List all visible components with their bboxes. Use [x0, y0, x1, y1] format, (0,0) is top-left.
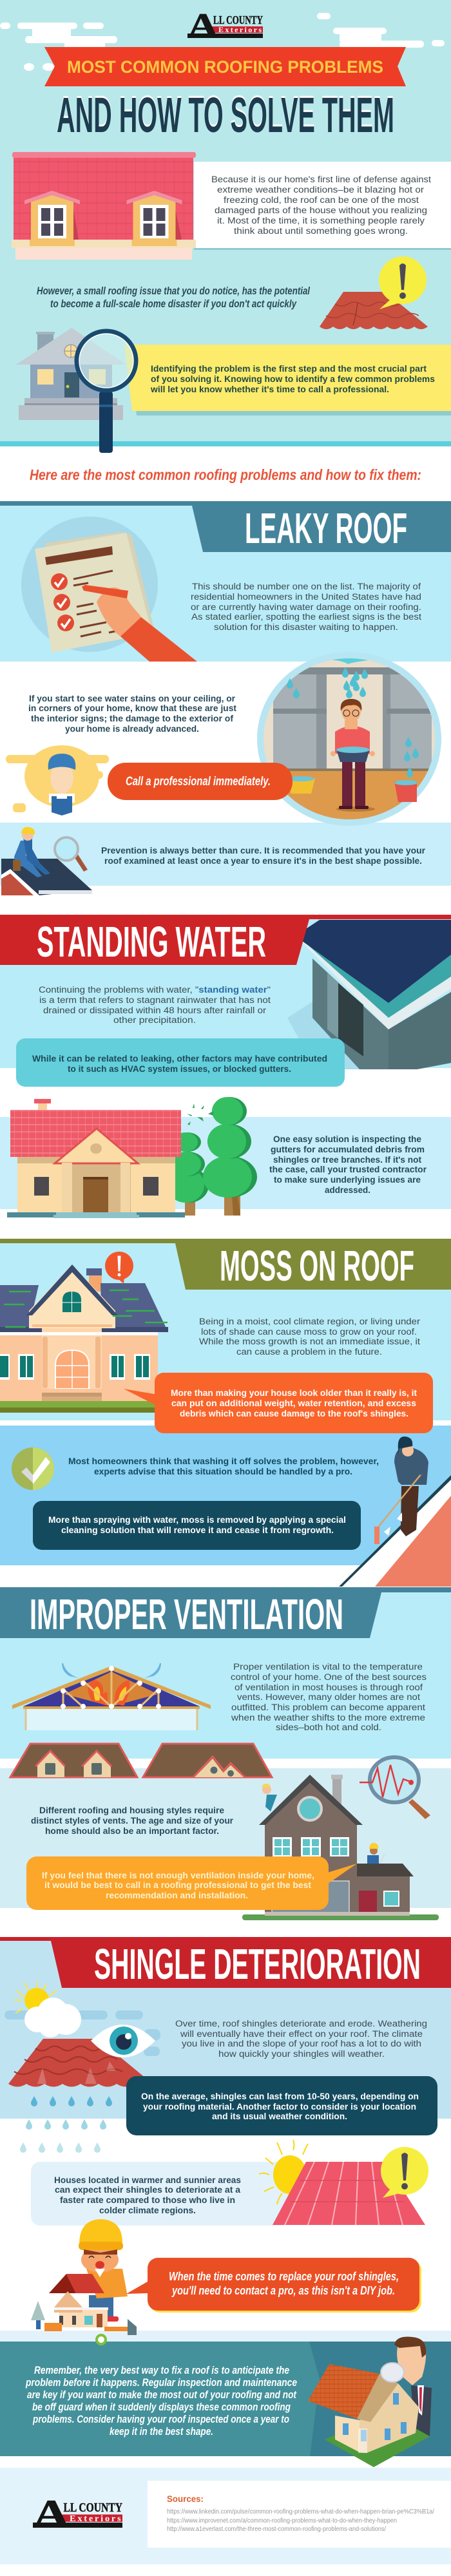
illustration: sloped salmon roof — [339, 1475, 451, 1587]
logo: footer — [33, 2492, 122, 2536]
icon: gray house — [16, 328, 126, 420]
text: proper ventilation: when the weather shifts to the more extreme — [231, 1713, 425, 1722]
text: roofing styles: home should also be an important factor. — [45, 1826, 219, 1836]
icon: repair worker — [6, 745, 109, 816]
raindrops — [20, 2096, 112, 2153]
decorative clouds — [0, 13, 445, 71]
text: proper ventilation — [231, 1662, 427, 1732]
panel: warmer areas: faster rate compared to those who live in — [60, 2195, 235, 2205]
icon: sun and cloud sky pills — [5, 1981, 160, 2056]
intro text panel: extreme weather conditions–be it blazing hot or — [217, 185, 425, 195]
illustration: house with moss — [0, 1264, 168, 1413]
icon: eye — [91, 2025, 155, 2057]
text: closing reminder: keep it in the best shape. — [110, 2425, 213, 2438]
text: water stains: the interior signs; the damage to the exterior of — [31, 714, 234, 723]
panel: warmer areas: colder climate regions. — [99, 2206, 196, 2215]
text: closing reminder: are key if you want to make the most out of your roofing and not — [27, 2389, 297, 2401]
text: standing water definition — [39, 985, 271, 1025]
warning statement: However, a small roofing issue that you do notice, has the potential — [37, 285, 311, 297]
icon: sun over pink roof — [259, 2140, 425, 2225]
intro text panel: think about until something goes wrong. — [234, 226, 408, 236]
icon: man with bowl — [331, 699, 375, 812]
callout: ventilation professional — [26, 1856, 357, 1910]
text: water stains — [28, 694, 237, 734]
illustration: red roof house — [7, 1099, 185, 1218]
text: water stains: your home is already advanced. — [65, 724, 199, 734]
text: moss cause: lots of shade can cause moss to grow on your roof. — [201, 1327, 417, 1337]
callout: ventilation professional: If you feel that there is not enough ventilation inside your home, — [42, 1871, 314, 1880]
text: closing reminder: be off guard when it suddenly displays these common roofing — [32, 2401, 291, 2413]
icon: blonde worker on roof — [262, 1784, 277, 1811]
callout: moss damage: can put on additional weight, water retention, and excess — [171, 1398, 416, 1408]
panel: warmer areas: can expect their shingles to deteriorate at a — [55, 2185, 241, 2195]
logo: footer: LL COUNTY — [64, 2499, 122, 2515]
icon: checklist with hand — [21, 517, 197, 667]
panel: sources: http://www.a1everlast.com/the-three-most-common-roofing-problems-and-solutions/ — [167, 2525, 386, 2533]
text: proper ventilation: Proper ventilation is vital to the temperature — [233, 1662, 423, 1672]
text: shingles erode: Over time, roof shingles deteriorate and erode. Weathering — [175, 2019, 427, 2028]
illustration: brown house — [242, 1775, 439, 1920]
panel: sources — [148, 2481, 451, 2548]
text: gutter solution: addressed. — [325, 1185, 370, 1195]
text: gutter solution: the case, call your trusted contractor — [269, 1165, 427, 1174]
text: gutter solution: One easy solution is inspecting the — [273, 1134, 421, 1144]
text: moss cause: Being in a moist, cool climate region, or living under — [199, 1317, 421, 1326]
text: washing it off: experts advise that this situation should be handled by a pro. — [94, 1467, 352, 1476]
callout: spraying with water: cleaning solution that will remove it and cease it from regrowth. — [61, 1525, 334, 1535]
logo: footer: Exteriors — [70, 2514, 121, 2524]
callout: contact a pro — [126, 2258, 421, 2313]
text: closing reminder — [25, 2364, 297, 2438]
callout: call a professional — [108, 763, 293, 800]
text: water stains: If you start to see water stains on your ceiling, or — [29, 694, 236, 703]
callout: spraying with water: More than spraying with water, moss is removed by applying a special — [48, 1515, 346, 1525]
text: gutter solution: gutters for accumulated debris from — [271, 1145, 425, 1154]
illustration: man catching leak in circle — [257, 652, 445, 829]
callout: moss damage: debris which can cause damage to the roof's shingles. — [180, 1409, 408, 1418]
icon: check badge — [12, 1447, 54, 1490]
panel: sources: Sources: — [167, 2494, 204, 2504]
title ribbon: MOST COMMON ROOFING PROBLEMS — [67, 57, 383, 77]
callout: ventilation professional: it would be best to call in a roofing professional to get the best — [44, 1880, 312, 1890]
text: roofing styles: Different roofing and housing styles require — [39, 1806, 224, 1815]
icon: two roofs with dormers — [10, 1744, 272, 1777]
text: proper ventilation: outfitted. This problem can become apparent — [231, 1703, 425, 1712]
icon: buckets — [287, 776, 417, 802]
intro text panel: freezing cold, the roof can be one of the most — [224, 195, 419, 205]
text: leaky roof intro: or are currently having water damage on their roofing. — [191, 602, 421, 612]
icon: yellow alert bubble — [381, 2147, 428, 2198]
illustration: man inspecting house — [308, 2337, 432, 2467]
water drops — [287, 667, 419, 778]
text: moss cause: can cause a problem in the future. — [236, 1347, 382, 1357]
illustration: man cleaning roof — [374, 1436, 428, 1544]
section header: moss on roof — [0, 1239, 451, 1290]
warning statement — [37, 285, 311, 310]
panel: warmer areas — [31, 2162, 290, 2226]
text: gutter solution: shingles or tree branches. If it's not — [273, 1155, 422, 1165]
text: shingles erode: you live in and the slope of your roof has a lot to do with — [182, 2039, 421, 2048]
callout: shingle lifespan: On the average, shingles can last from 10-50 years, depending on — [141, 2092, 419, 2101]
text: prevention: roof examined at least once a year to ensure it's in the best shape possible. — [104, 856, 422, 866]
callout: shingle lifespan — [126, 2076, 437, 2135]
text: washing it off: Most homeowners think that washing it off solves the problem, however, — [68, 1456, 379, 1466]
icon: magnifying glass — [77, 331, 136, 453]
yellow panel: identifying the problem — [124, 345, 451, 415]
text: standing water definition: other precipitation. — [113, 1015, 196, 1025]
text: proper ventilation: vents. However, many older homes are not — [237, 1692, 420, 1702]
text: roofing styles — [31, 1806, 234, 1836]
text: shingles erode: how quickly your shingles will weather. — [218, 2049, 385, 2059]
logo: footer: A — [33, 2492, 70, 2536]
text: shingles erode — [175, 2019, 427, 2059]
icon: worker with hard hat — [367, 1843, 385, 1864]
text: proper ventilation: control of your home. One of the best sources — [231, 1672, 427, 1682]
text: gutter solution — [269, 1134, 427, 1195]
callout: spraying with water — [33, 1501, 361, 1550]
icon: cracked roof with alert bubble — [320, 256, 428, 329]
text: proper ventilation: of ventilation in most houses is through roof — [235, 1683, 423, 1692]
panel: warmer areas: Houses located in warmer and sunnier areas — [54, 2175, 241, 2185]
text: leaky roof intro: As stated earlier, spotting the earliest signs is the best — [191, 612, 421, 622]
text: proper ventilation: sides–both hot and cold. — [276, 1722, 381, 1732]
illustration: roof truss with heat — [12, 1663, 211, 1730]
yellow panel: identifying the problem: will let you know whether it's time to call a professional. — [150, 385, 389, 394]
intro text panel: it. Most of the time, it is something people rarely — [217, 216, 425, 225]
text: standing water definition: drained or dissipated within 48 hours after rainfall or — [43, 1006, 267, 1015]
yellow panel: identifying the problem: Identifying the problem is the first step and the most crucial part — [151, 364, 427, 374]
icon: roofer with magnifier — [1, 827, 92, 895]
callout: moss damage: More than making your house look older than it really is, it — [171, 1388, 417, 1398]
callout: other factors: While it can be related to leaking, other factors may have contributed — [32, 1054, 327, 1064]
logo: All County Exteriors — [187, 6, 263, 45]
section header: standing water: STANDING WATER — [37, 918, 266, 966]
icon: red roof with rain — [8, 2039, 153, 2087]
icon: orange alert bubble — [105, 1252, 133, 1284]
icon: magnifier with pulse — [360, 1757, 430, 1819]
text: closing reminder: problems. Consider having your roof inspected once a year to — [32, 2413, 289, 2425]
icon: red roof with dormers — [12, 152, 196, 260]
callout: other factors: to it such as HVAC system issues, or blocked gutters. — [68, 1064, 291, 1074]
callout: shingle lifespan: your roofing material. Another factor to consider is your location — [143, 2102, 416, 2112]
warning statement: to become a full-scale home disaster if you don't act quickly — [50, 298, 297, 310]
text: standing water definition: Continuing the problems with water, " standing water " — [39, 985, 271, 995]
text: leaky roof intro — [191, 582, 421, 632]
section header: leaky roof — [0, 501, 451, 553]
callout: other factors — [16, 1038, 345, 1087]
text: prevention: Prevention is always better than cure. It is recommended that you have your — [101, 846, 426, 855]
text: closing reminder: problem before it happens. Regular inspection and maintenance — [25, 2376, 297, 2389]
yellow panel: identifying the problem: of you solving it. Knowing how to identify a few common problems — [151, 374, 435, 384]
text: prevention — [101, 846, 426, 866]
callout: ventilation professional: recommendation and installation. — [106, 1891, 248, 1900]
text: shingles erode: will eventually have their effect on your roof. The climate — [180, 2029, 423, 2039]
intro text panel: damaged parts of the house without you realizing — [215, 205, 427, 215]
callout: contact a pro: you'll need to contact a pro, as this isn't a DIY job. — [171, 2284, 395, 2297]
icon: trees — [167, 1097, 257, 1216]
callout: call a professional: Call a professional immediately. — [126, 775, 271, 788]
text: moss cause — [199, 1317, 421, 1357]
text: leaky roof intro: This should be number one on the list. The majority of — [192, 582, 421, 591]
illustration: dark roof house — [287, 920, 451, 1069]
text: washing it off — [68, 1456, 379, 1476]
text: leaky roof intro: residential homeowners in the United States have had — [191, 592, 421, 602]
text: moss cause: While the moss growth is not an immediate issue, it — [199, 1337, 420, 1346]
logo: All County Exteriors: Exteriors — [218, 25, 262, 34]
icon: worker with roof and small house — [31, 2219, 137, 2344]
panel: sources: https://www.improvenet.com/a/common-roofing-problems-what-to-do-when-they-happen — [167, 2517, 397, 2524]
logo: All County Exteriors: A — [187, 6, 218, 45]
intro text panel — [194, 162, 451, 250]
text: water stains: in corners of your home, know that these are just — [28, 703, 237, 713]
callout: moss damage — [124, 1373, 433, 1433]
text: leaky roof intro: solution for this disaster waiting to happen. — [214, 622, 398, 632]
title ribbon — [44, 47, 406, 86]
intro text panel: Because it is our home's first line of defense against — [211, 175, 431, 184]
text: closing reminder: Remember, the very best way to fix a roof is to anticipate the — [34, 2364, 289, 2376]
text: standing water definition: is a term that refers to stagnant rainwater that has not — [39, 995, 271, 1005]
logo: All County Exteriors: LL COUNTY — [213, 14, 263, 26]
text: roofing styles: distinct styles of vents. The age and size of your — [31, 1816, 234, 1826]
text: gutter solution: to make sure underlying issues are — [274, 1175, 421, 1185]
callout: shingle lifespan: and its usual weather condition. — [212, 2112, 347, 2121]
